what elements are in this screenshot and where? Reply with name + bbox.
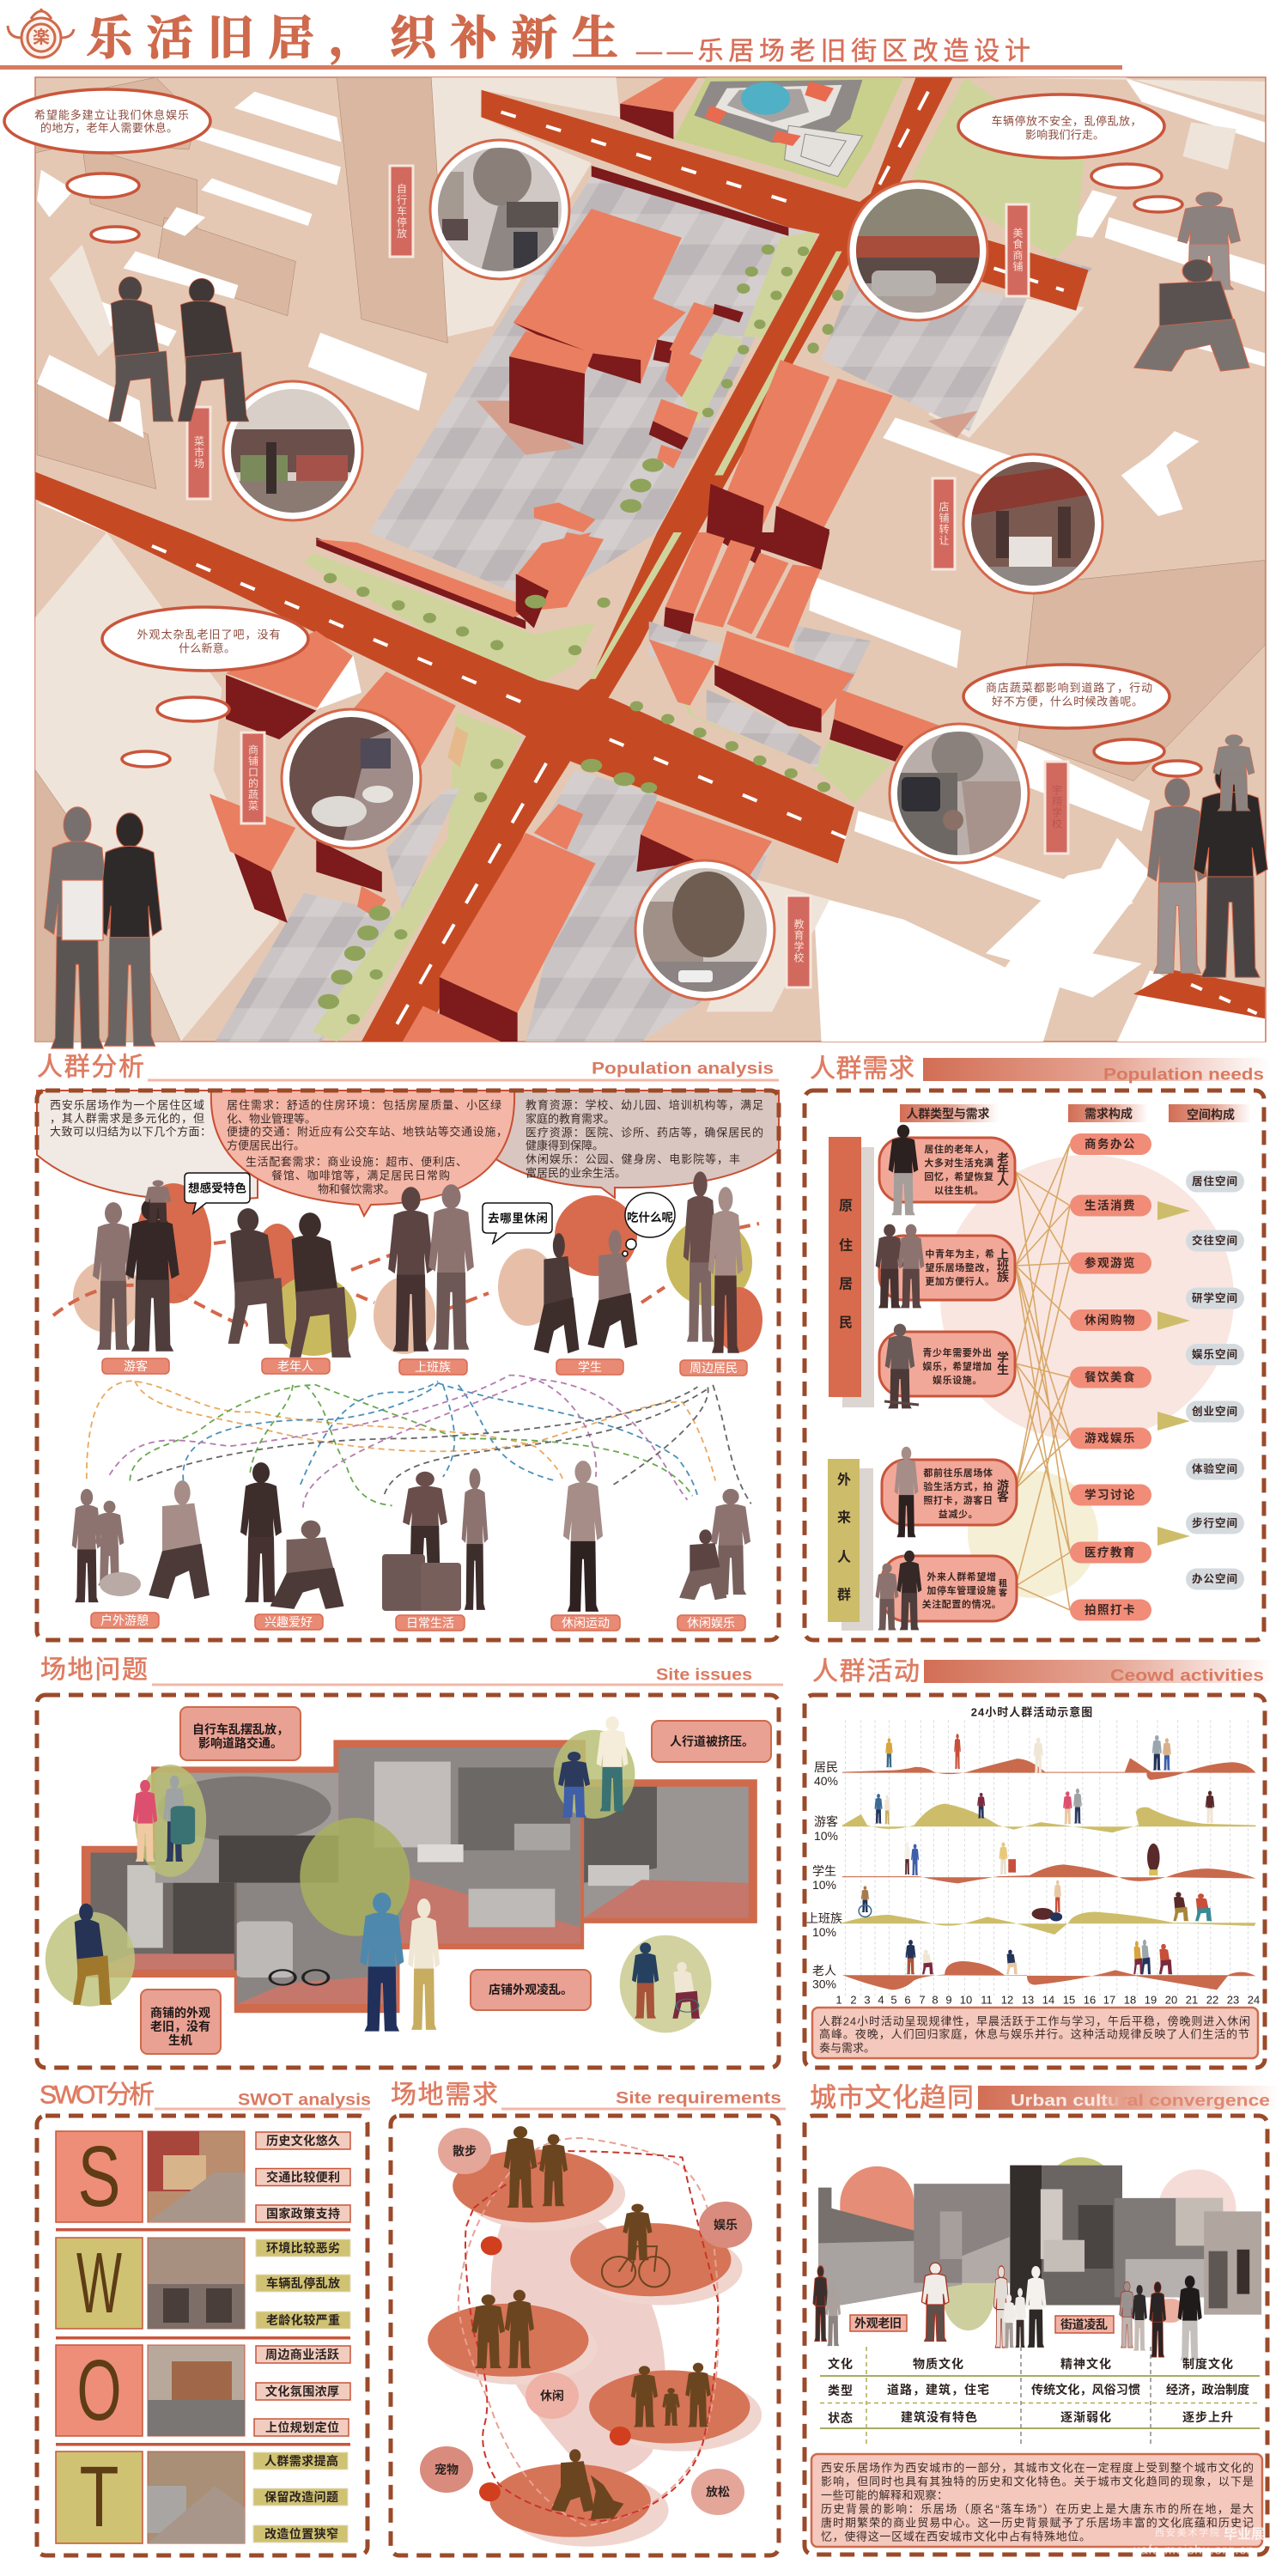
card: elderly: 人	[997, 1174, 1009, 1188]
hour ticks: 14	[1042, 1994, 1054, 2006]
section heading: SWOT: SWOT分析	[39, 2081, 155, 2109]
hour ticks: 13	[1022, 1994, 1034, 2006]
space pills: 创业空间	[1192, 1405, 1238, 1418]
people labels row 2: 休闲运动	[562, 1616, 610, 1630]
activity figures	[859, 1734, 1214, 1974]
row T: T	[79, 2449, 118, 2545]
card: office workers: 族	[997, 1270, 1009, 1284]
card: tenants: 客	[999, 1587, 1007, 1599]
vertical label: bicycle parking: 自行车停放	[395, 183, 407, 239]
row W: W	[76, 2235, 122, 2331]
speech bubble: appearance: 什么新意。	[179, 642, 235, 654]
panel: population analysis	[37, 1091, 779, 1640]
bar: visitors: 来	[837, 1510, 851, 1525]
note	[812, 2008, 1258, 2058]
speech bubble: street vegetables	[963, 665, 1201, 776]
photo collage	[46, 1716, 757, 2032]
hour ticks: 5	[890, 1994, 897, 2006]
hour ticks: 3	[864, 1994, 871, 2006]
card: students: 青少年需要外出	[922, 1346, 993, 1358]
row labels: 居民	[814, 1760, 838, 1774]
culture table: 精神文化	[1060, 2357, 1112, 2371]
subtitle: ——乐居场老旧街区改造设计	[636, 38, 1030, 65]
chart title: 24小时人群活动示意图	[971, 1705, 1093, 1719]
vertical label: education school	[787, 896, 811, 987]
dashed trend line	[53, 1224, 759, 1326]
vertical label: street vegetables	[241, 732, 264, 823]
hour ticks: 24	[1248, 1994, 1260, 2006]
section heading: population needs: 人群需求	[810, 1054, 915, 1084]
people labels row 2: 户外游憩	[100, 1613, 149, 1627]
panel: urban cultural convergence	[805, 2116, 1267, 2557]
callout: pavement	[652, 1721, 771, 1762]
hour ticks: 21	[1186, 1994, 1198, 2006]
note: 高峰。夜晚，人们回归家庭，休息与娱乐并行。这种活动规律反映了人们生活的节	[819, 2028, 1249, 2040]
panel: crowd activities	[805, 1695, 1265, 2068]
people labels row 2	[91, 1613, 745, 1631]
bar: visitors: 群	[837, 1587, 851, 1602]
panel: site requirements	[391, 2116, 779, 2555]
card: tenants: 加停车管理设施	[927, 1584, 997, 1596]
photo collage	[813, 2157, 1261, 2360]
card: office workers: 中青年为主，希	[925, 1248, 995, 1260]
culture table: 逐渐弱化	[1060, 2410, 1112, 2424]
photo circle: bicycle parking	[430, 140, 569, 279]
row labels: 30%	[812, 1977, 836, 1990]
panel: SWOT	[37, 2116, 368, 2555]
row labels: 10%	[812, 1925, 836, 1939]
hour ticks: 16	[1084, 1994, 1096, 2006]
hour ticks: 9	[945, 1994, 952, 2006]
demand pills: 参观游览	[1084, 1255, 1136, 1269]
hour ticks: 23	[1227, 1994, 1239, 2006]
watermark: xafa.meishu.org.cn	[1133, 2543, 1254, 2557]
section heading: crowd activities	[812, 1657, 1273, 1686]
row T: 改造位置狭窄	[264, 2527, 338, 2541]
callout: old shops	[141, 1990, 221, 2054]
note: 人群24小时活动呈现规律性，早晨活跃于工作与学习，午后平稳，傍晚则进入休闲	[819, 2014, 1250, 2028]
section heading: site issues	[40, 1656, 783, 1685]
hour ticks: 12	[1001, 1994, 1013, 2006]
vertical label: food shops	[1006, 204, 1029, 296]
callout: old shops: 商铺的外观	[150, 2006, 210, 2020]
vertical label: shop transfer	[933, 478, 955, 569]
row labels: 40%	[814, 1774, 838, 1788]
bar: visitors: 外	[837, 1472, 851, 1487]
thought cloud: what to eat	[623, 1193, 675, 1256]
photo circle: street vegetables	[282, 709, 421, 848]
card: tourists: 游	[997, 1479, 1009, 1492]
activity bubble diagram	[428, 2126, 762, 2547]
row labels: 游客	[814, 1815, 838, 1829]
card: students: 学	[997, 1351, 1009, 1364]
card: office workers: 班	[997, 1259, 1009, 1273]
text block: living needs: 生活配套需求：商业设施：超市、便利店、	[246, 1156, 467, 1168]
row labels: 学生	[812, 1864, 836, 1878]
text block: living needs: 便捷的交通：附近应有公交车站、地铁站等交通设施，	[227, 1125, 507, 1139]
row labels: 10%	[814, 1829, 838, 1843]
photo circle: school	[635, 860, 775, 999]
culture table: 经济，政治制度	[1166, 2383, 1250, 2397]
label: messy street: 街道凌乱	[1060, 2318, 1109, 2331]
vertical label: market	[187, 407, 210, 499]
bar: original residents: 原	[839, 1199, 853, 1214]
hour ticks: 1	[835, 1994, 842, 2006]
hour ticks: 7	[919, 1994, 926, 2006]
vertical label: bicycle parking	[390, 166, 413, 257]
text block: intro: ，其人群需求是多元化的，但	[50, 1112, 204, 1125]
callout: right bubble	[489, 1091, 779, 1198]
people row 1	[93, 1171, 743, 1358]
hour ticks: 2	[850, 1994, 857, 2006]
label: old appearance: 外观老旧	[854, 2317, 902, 2330]
text block: services	[526, 1099, 763, 1180]
panel: axonometric street map	[4, 77, 1267, 1048]
text block: services: 富居民的业余生活。	[526, 1166, 626, 1180]
speech tag: want to feel the character: 想感受特色	[188, 1182, 247, 1195]
culture table: 传统文化，风俗习惯	[1031, 2383, 1141, 2397]
label: messy street	[1055, 2316, 1114, 2333]
speech bubble: elderly	[4, 89, 210, 242]
section heading: population analysis: Population analysis	[592, 1060, 774, 1078]
hour ticks: 11	[981, 1994, 993, 2006]
hour ticks: 4	[878, 1994, 884, 2006]
text block: living needs: 物和餐饮需求。	[318, 1183, 395, 1195]
bar: original residents: 民	[839, 1315, 853, 1331]
note: 一些可能的解释和观察：	[821, 2488, 948, 2502]
text block: intro: 大致可以归结为以下几个方面：	[50, 1125, 211, 1139]
speech tag: want to feel the character	[185, 1173, 250, 1213]
people labels row 1: 游客	[124, 1359, 148, 1373]
vertical label: food shops: 美食商铺	[1012, 228, 1024, 272]
photo circle: vegetable market	[223, 381, 362, 520]
callout: shop appearance: 店铺外观凌乱。	[489, 1983, 573, 1996]
watermark: 西安美术学院	[1155, 2526, 1219, 2538]
card: tourists: 都前往乐居场体	[923, 1467, 993, 1479]
callout: bikes	[180, 1707, 301, 1760]
watermark	[1133, 2526, 1265, 2557]
section heading: crowd activities: 人群活动	[812, 1657, 920, 1686]
bird silhouettes	[953, 431, 1200, 1042]
column headers: 人群类型与需求	[907, 1107, 989, 1121]
vertical label: faint school	[1045, 762, 1068, 854]
row T: 人群需求提高	[264, 2454, 338, 2468]
card: office workers	[876, 1224, 1015, 1308]
demand pills: 拍照打卡	[1084, 1602, 1136, 1616]
pale background circles	[940, 1155, 1234, 1598]
text block: living needs: 化、物业管理等。	[227, 1113, 316, 1125]
card: tenants: 关注配置的情况。	[922, 1598, 1001, 1610]
row S: S	[77, 2129, 120, 2225]
column headers: 需求构成	[1084, 1107, 1133, 1121]
section heading: site issues: 场地问题	[40, 1656, 149, 1685]
culture table: 物质文化	[913, 2357, 964, 2371]
text block: living needs: 餐馆、咖啡馆等，满足居民日常购	[271, 1170, 450, 1182]
map drawing	[35, 77, 1265, 1042]
vertical label: street vegetables: 商铺口的蔬菜	[247, 744, 259, 811]
card: elderly: 以往生机。	[934, 1184, 984, 1196]
row W: 车辆乱停乱放	[266, 2276, 340, 2290]
section heading: urban cultural convergence: Urban cultural convergence	[1011, 2092, 1270, 2111]
bar: original residents	[829, 1137, 874, 1407]
speech bubble: elderly: 希望能多建立让我们休息娱乐	[34, 108, 189, 122]
section heading: population needs: Population needs	[1103, 1066, 1264, 1084]
hour ticks: 17	[1103, 1994, 1115, 2006]
speech bubble: parking	[958, 94, 1182, 212]
bar: original residents: 住	[839, 1236, 853, 1254]
photo circle: food shops	[848, 181, 987, 320]
section heading: urban cultural convergence	[810, 2083, 1279, 2112]
vertical label: market: 菜市场	[192, 435, 204, 469]
hour ticks: 15	[1063, 1994, 1075, 2006]
card: tourists: 益减少。	[939, 1508, 978, 1520]
small label circles: 娱乐	[714, 2218, 738, 2232]
panel: site issues	[37, 1695, 779, 2068]
callout: centre bubble	[211, 1091, 514, 1216]
note	[811, 2454, 1262, 2547]
callout: bikes: 影响道路交通。	[198, 1736, 283, 1750]
row labels: 10%	[812, 1878, 836, 1892]
hour ticks: 6	[904, 1994, 911, 2006]
text block: services: 健康得到保障。	[526, 1139, 604, 1152]
row S: 交通比较便利	[266, 2171, 340, 2184]
vertical label: faint school: 宇翔学校	[1051, 785, 1063, 829]
card: students: 娱乐设施。	[933, 1374, 982, 1386]
card: tenants: 外来人群希望增	[927, 1571, 997, 1583]
people labels row 2: 休闲娱乐	[687, 1616, 735, 1630]
card: tourists: 照打卡，游客日	[923, 1494, 993, 1506]
row S: 国家政策支持	[266, 2207, 340, 2221]
thought cloud: what to eat: 吃什么呢	[627, 1211, 673, 1224]
row labels: 老人	[812, 1964, 836, 1978]
people labels row 1: 上班族	[415, 1360, 451, 1374]
card: elderly: 大多对生活充满	[924, 1157, 994, 1169]
bar: visitors: 人	[837, 1551, 851, 1564]
people labels row 1: 老年人	[277, 1359, 313, 1373]
note: 影响，但同时也具有其独特的历史和文化特色。关于城市文化趋同的现象，以下是	[821, 2475, 1254, 2488]
row O: 文化氛围浓厚	[265, 2385, 339, 2398]
speech bubble: appearance	[102, 607, 308, 767]
speech bubble: street vegetables: 好不方便，什么时候改善呢。	[992, 696, 1143, 708]
row T	[56, 2449, 348, 2545]
arrows: olive triangles	[1157, 1201, 1190, 1546]
text block: services: 家庭的教育需求。	[526, 1113, 615, 1125]
card: elderly	[879, 1125, 1015, 1215]
demand pills: 游戏娱乐	[1084, 1431, 1136, 1444]
watermark: 毕业展	[1224, 2526, 1265, 2542]
section heading: SWOT	[39, 2081, 371, 2109]
demand pills	[1070, 1133, 1151, 1621]
culture table	[820, 2347, 1260, 2446]
note: 唐时期繁荣的商业贸易中心。这一历史背景赋予了乐居场丰富的文化底蕴和历史记	[821, 2516, 1254, 2530]
card: tourists: 客	[997, 1490, 1009, 1504]
card: office workers: 上	[997, 1248, 1009, 1261]
row O: O	[77, 2342, 122, 2439]
section heading: population analysis	[37, 1053, 779, 1082]
dashed relation lines	[87, 1376, 751, 1508]
people labels row 1: 周边居民	[690, 1361, 738, 1375]
area chart: 24 hour activity	[842, 1720, 1256, 1998]
hour ticks: 22	[1206, 1994, 1218, 2006]
hour ticks	[835, 1994, 1260, 2006]
panel: population needs	[805, 1091, 1264, 1640]
hour ticks: 10	[960, 1994, 972, 2006]
section heading: population analysis: 人群分析	[37, 1053, 145, 1082]
speech tag: where to relax: 去哪里休闲	[488, 1211, 548, 1224]
section heading: SWOT: SWOT analysis	[238, 2092, 371, 2109]
text block: living needs: 居住需求：舒适的住房环境：包括房屋质量、小区绿	[227, 1099, 501, 1111]
hour ticks: 18	[1124, 1994, 1136, 2006]
small label circles: 散步	[453, 2144, 477, 2158]
text block: services: 休闲娱乐：公园、健身房、电影院等，丰	[526, 1152, 740, 1166]
text block: living needs: 方便居民出行。	[227, 1139, 305, 1152]
card: office workers: 望乐居场整改，	[925, 1261, 995, 1273]
photo circle: shop front	[963, 454, 1103, 593]
people labels row 1: 学生	[578, 1360, 602, 1374]
row W: 老龄化较严重	[266, 2313, 340, 2327]
section heading: population needs	[810, 1054, 1270, 1084]
culture table: 建筑没有特色	[901, 2410, 978, 2424]
card: tenants	[876, 1551, 1017, 1630]
card: elderly: 回忆，希望恢复	[924, 1170, 994, 1182]
callout: left bubble	[37, 1091, 258, 1200]
callout: bikes: 自行车乱摆乱放，	[192, 1722, 289, 1736]
demand pills: 学习讨论	[1084, 1487, 1136, 1501]
row O: 上位规划定位	[265, 2421, 339, 2434]
icon: teapot logo: 楽	[33, 27, 50, 47]
space pills: 办公空间	[1192, 1572, 1238, 1585]
card: tourists	[882, 1447, 1017, 1537]
callout: shop appearance	[471, 1970, 591, 2010]
card: elderly: 年	[997, 1163, 1009, 1176]
hour ticks: 8	[932, 1994, 939, 2006]
space pills	[1186, 1171, 1244, 1590]
speech tag: where to relax	[483, 1203, 552, 1243]
card: tenants: 租	[999, 1578, 1007, 1589]
people labels row 1	[102, 1358, 747, 1376]
space pills: 娱乐空间	[1192, 1348, 1238, 1361]
card: elderly: 老	[997, 1151, 1009, 1165]
text block: intro: 西安乐居场作为一个居住区域	[50, 1099, 204, 1111]
text block: services: 医疗资源：医院、诊所、药店等，确保居民的	[526, 1127, 763, 1139]
vertical label: shop transfer: 店铺转让	[938, 501, 950, 546]
small label circles: 放松	[706, 2485, 730, 2499]
card: students: 娱乐，希望增加	[922, 1360, 993, 1372]
culture table: 道路，建筑，住宅	[887, 2383, 990, 2397]
bar: visitors	[828, 1459, 873, 1631]
row S	[56, 2129, 350, 2225]
note: 西安乐居场作为西安城市的一部分，其城市文化在一定程度上受到整个城市文化的	[821, 2461, 1254, 2475]
card: elderly: 居住的老年人，	[924, 1143, 994, 1155]
note: 奏与需求。	[819, 2042, 875, 2054]
section heading: site issues: Site issues	[656, 1666, 752, 1685]
culture table: 文化	[828, 2357, 854, 2371]
section heading: crowd activities: Ceowd activities	[1110, 1668, 1264, 1685]
space pills: 居住空间	[1192, 1175, 1238, 1188]
row O	[56, 2342, 350, 2439]
people labels row 2: 日常生活	[406, 1616, 454, 1630]
text block: living needs	[227, 1099, 507, 1195]
small label circles	[420, 2128, 752, 2515]
row T: 保留改造问题	[264, 2490, 338, 2504]
column headers: 空间构成	[1187, 1108, 1235, 1121]
header rule	[0, 65, 1122, 70]
space pills: 研学空间	[1192, 1291, 1238, 1304]
callout: old shops: 生机	[168, 2033, 192, 2047]
hour ticks: 19	[1145, 1994, 1157, 2006]
people row 2	[72, 1461, 750, 1612]
note: 历史背景的影响：乐居场（原名“落车场”）在历史上是大唐东市的所在地，是大	[821, 2502, 1254, 2516]
icon: teapot logo	[8, 9, 74, 58]
title: 乐活旧居，织补新生	[86, 13, 618, 65]
section heading: site requirements: Site requirements	[616, 2090, 781, 2107]
vertical label: education school: 教育学校	[793, 918, 805, 963]
connecting lines	[1016, 1144, 1070, 1610]
people on map	[45, 192, 1267, 1048]
bar: original residents: 居	[839, 1278, 853, 1291]
culture table: 类型	[828, 2384, 854, 2397]
text block: services: 教育资源：学校、幼儿园、培训机构等，满足	[526, 1099, 763, 1111]
speech bubble: parking: 影响我们行走。	[1025, 129, 1104, 141]
space pills: 体验空间	[1192, 1462, 1238, 1475]
photo circle: parked cars	[890, 724, 1029, 863]
text block: intro	[50, 1099, 211, 1139]
hour ticks: 20	[1165, 1994, 1177, 2006]
speech bubble: street vegetables: 商店蔬菜都影响到道路了，行动	[986, 682, 1152, 694]
callout: pavement: 人行道被挤压。	[670, 1735, 754, 1748]
row W	[56, 2235, 350, 2331]
space pills: 交往空间	[1192, 1234, 1238, 1247]
culture table: 制度文化	[1182, 2357, 1234, 2371]
demand pills: 生活消费	[1084, 1199, 1136, 1212]
header: logo and title	[0, 9, 1122, 70]
row labels	[806, 1760, 842, 1990]
demand pills: 医疗教育	[1084, 1546, 1136, 1559]
callout: old shops: 老旧，没有	[150, 2020, 210, 2033]
row S: 历史文化悠久	[266, 2134, 340, 2148]
background circles	[73, 1183, 762, 1356]
section heading: site requirements: 场地需求	[391, 2081, 499, 2109]
demand pills: 餐饮美食	[1084, 1370, 1136, 1384]
culture table: 逐步上升	[1182, 2410, 1234, 2424]
note: 忆，使得这一区域在西安城市文化中占有特殊地位。	[821, 2530, 1091, 2543]
culture table: 状态	[828, 2411, 854, 2425]
card: students: 生	[997, 1363, 1009, 1376]
row W: 环境比较恶劣	[266, 2241, 340, 2255]
speech bubble: elderly: 的地方，老年人需要休息。	[40, 122, 178, 134]
speech bubble: appearance: 外观太杂乱老旧了吧，没有	[137, 629, 280, 641]
demand pills: 商务办公	[1084, 1137, 1136, 1151]
section heading: site requirements	[391, 2081, 786, 2109]
row labels: 上班族	[806, 1911, 842, 1925]
card: students	[879, 1324, 1015, 1408]
demand pills: 休闲购物	[1084, 1313, 1136, 1327]
people labels row 2: 兴趣爱好	[264, 1615, 313, 1629]
space pills: 步行空间	[1192, 1516, 1238, 1529]
card: office workers: 更加方便行人。	[925, 1275, 995, 1287]
column headers	[900, 1104, 1251, 1122]
small label circles: 宠物	[434, 2463, 459, 2476]
speech bubble: parking: 车辆停放不安全，乱停乱放，	[991, 115, 1142, 127]
small label circles: 休闲	[540, 2389, 564, 2403]
section heading: urban cultural convergence: 城市文化趋同	[810, 2083, 975, 2112]
card: tourists: 验生活方式，拍	[923, 1480, 993, 1492]
row O: 周边商业活跃	[265, 2348, 339, 2361]
